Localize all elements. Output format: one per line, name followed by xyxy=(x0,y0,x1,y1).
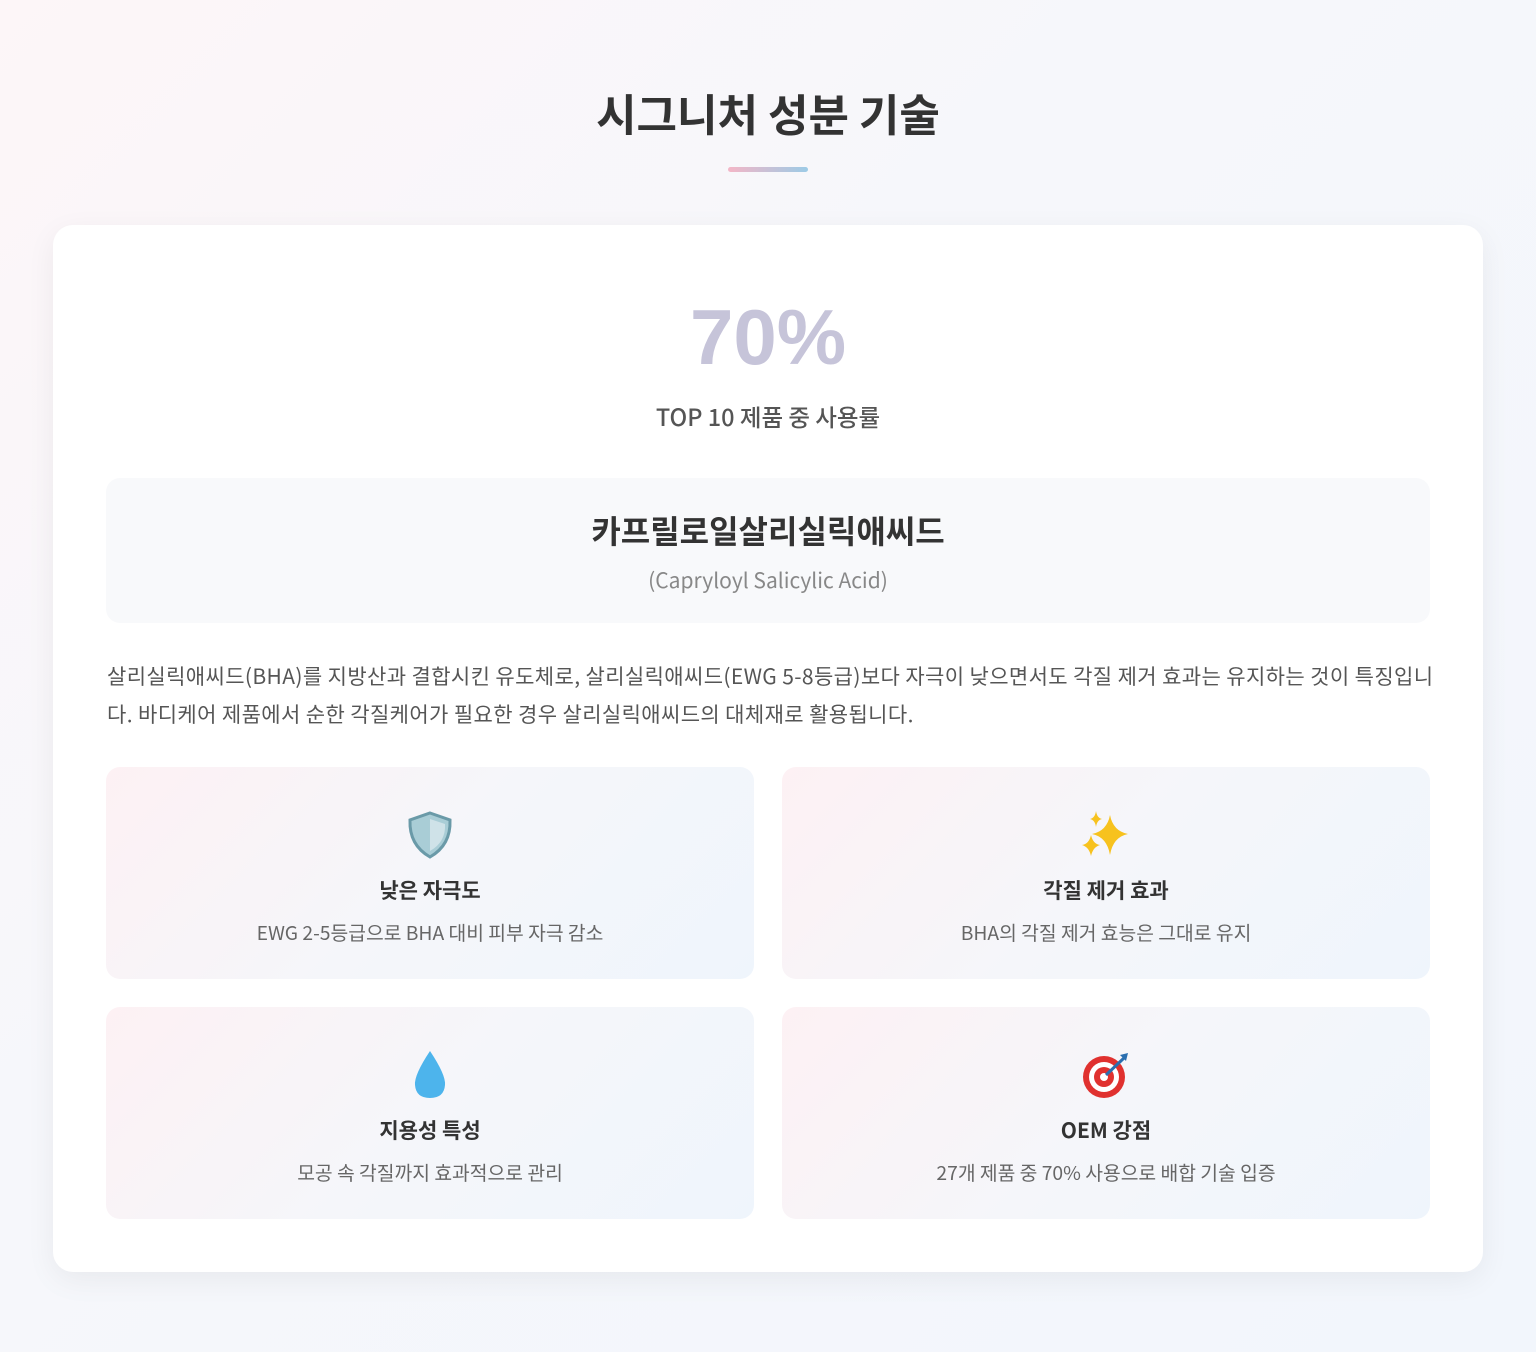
feature: lipid solubility: 모공 속 각질까지 효과적으로 관리 xyxy=(297,1158,563,1186)
main card xyxy=(53,225,1483,1272)
feature: low irritation xyxy=(106,767,754,979)
ingredient korean name: 카프릴로일살리실릭애씨드 xyxy=(591,507,945,553)
stat: 70%: 70% xyxy=(690,293,846,381)
stat label: TOP 10 제품 중 사용률 xyxy=(656,399,880,433)
ingredient english name: (Capryloyl Salicylic Acid) xyxy=(648,565,888,595)
feature: exfoliation: BHA의 각질 제거 효능은 그대로 유지 xyxy=(961,918,1251,946)
feature: OEM strength: OEM 강점 xyxy=(1061,1115,1151,1145)
feature: lipid solubility: 지용성 특성 xyxy=(379,1115,481,1145)
icon: target xyxy=(1083,1053,1128,1098)
title: 시그니처 성분 기술 xyxy=(596,80,940,144)
feature: exfoliation xyxy=(782,767,1430,979)
feature: OEM strength: 27개 제품 중 70% 사용으로 배합 기술 입증 xyxy=(936,1158,1276,1186)
icon: shield xyxy=(408,811,452,859)
feature: exfoliation: 각질 제거 효과 xyxy=(1043,875,1169,905)
feature: low irritation: EWG 2-5등급으로 BHA 대비 피부 자극 감소 xyxy=(257,918,603,946)
icon: sparkles xyxy=(1082,811,1128,856)
feature: lipid solubility xyxy=(106,1007,754,1219)
feature: low irritation: 낮은 자극도 xyxy=(379,875,481,905)
feature: OEM strength xyxy=(782,1007,1430,1219)
ingredient name box xyxy=(106,478,1430,623)
icon: water drop xyxy=(414,1051,445,1098)
description paragraph: 살리실릭애씨드(BHA)를 지방산과 결합시킨 유도체로, 살리실릭애씨드(EWG 5-8등급)보다 자극이 낮으면서도 각질 제거 효과는 유지하는 것이 특징입니다. 바디케어 제품에서 순한 각질케어가 필요한 경우 살리실릭애씨드의 대체재로 활용됩니다. xyxy=(107,661,1433,729)
title underline xyxy=(728,167,808,172)
